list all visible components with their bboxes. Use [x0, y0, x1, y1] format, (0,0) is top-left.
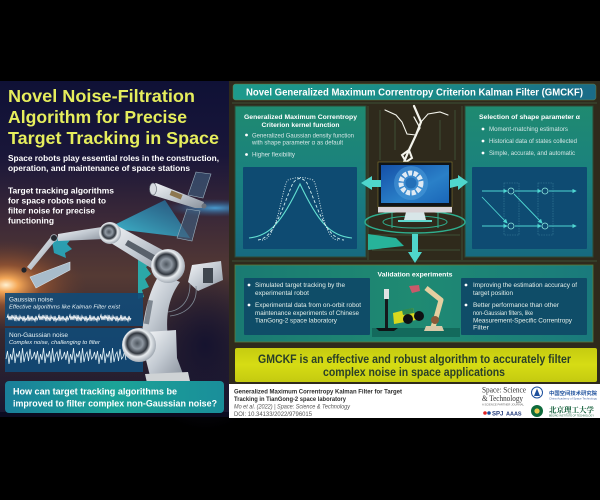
text block: left findings: TianGong-2 space laboratory	[255, 318, 338, 324]
panel: selection of shape parameter: Historical data of states collected	[489, 138, 578, 145]
panel: Gaussian noise: Effective algorithms like Kalman Filter exist	[9, 304, 120, 310]
arrow: down to validation	[408, 234, 422, 263]
panel: selection of shape parameter	[465, 106, 593, 257]
text block: target tracking: for space robots need to	[8, 196, 106, 206]
heading bar: Novel Generalized Maximum Correntropy Criterion Kalman Filter (GMCKF)	[246, 88, 583, 98]
panel: left space background	[0, 81, 275, 430]
wave: Gaussian	[7, 315, 131, 321]
upper arm	[106, 225, 170, 276]
logo: journal: Space: Science	[482, 386, 526, 394]
text block: right findings: Filter	[473, 324, 489, 332]
logo: Beijing Institute of Technology: BEIJING INSTITUTE OF TECHNOLOGY	[549, 414, 594, 418]
callout: conclusion: GMCKF is an effective and robust algorithm to accurately filter	[258, 353, 571, 366]
text block: citation: Generalized Maximum Correntropy Kalman Filter for Target	[234, 388, 402, 396]
panel: Gaussian noise: Gaussian noise	[9, 296, 53, 304]
text block: target tracking: functioning	[8, 216, 54, 226]
wrist joint	[99, 222, 121, 244]
text block: right findings: Measurement-Specific Correntropy	[473, 318, 573, 324]
logo: journal: & Technology	[482, 394, 523, 403]
text block: left findings: maintenance experiments of Chinese	[255, 310, 360, 317]
title: Novel Noise-Filtration	[8, 86, 195, 106]
callout: question: improved to filter complex non-Gaussian noise?	[13, 398, 217, 408]
text block: left findings	[244, 278, 370, 335]
logo: journal	[482, 386, 526, 418]
panel: selection of shape parameter: Selection of shape parameter α	[479, 114, 581, 121]
text block: citation: Tracking in TianGong-2 space laboratory	[234, 396, 347, 403]
icon: lightning	[385, 106, 448, 162]
panel: selection of shape parameter: Simple, accurate, and automatic	[489, 150, 575, 157]
lower arm	[142, 274, 180, 338]
text block: right findings: target position	[473, 290, 514, 297]
text block: right findings: Better performance than other	[473, 302, 559, 309]
icon: computer	[365, 162, 465, 233]
panel: validation experiments: Validation experiments	[378, 272, 453, 278]
arrow: to right panel	[450, 175, 468, 190]
logo: journal: SPJ	[492, 412, 503, 418]
forearm	[58, 227, 104, 241]
wave: non-Gaussian	[6, 348, 126, 364]
text block: target tracking	[8, 186, 114, 226]
panel: Gaussian noise	[5, 293, 143, 326]
text block: right findings: non-Gaussian filters, like	[473, 310, 533, 317]
title: Target Tracking in Space	[8, 128, 219, 148]
logo: journal: A SCIENCE PARTNER JOURNAL	[482, 402, 525, 406]
icon: experiment equipment	[372, 285, 460, 337]
panel: Non-Gaussian noise: Complex noise, challenging to filter	[9, 340, 101, 346]
logo: Beijing Institute of Technology: 北京理工大学	[549, 404, 594, 414]
logo: China Academy of Space Technology: China Academy of Space Technology	[549, 396, 598, 400]
text block: left findings: Simulated target tracking by the	[255, 282, 346, 289]
text block: left findings: experimental robot	[255, 290, 309, 297]
panel: selection of shape parameter: Moment-matching estimators	[489, 126, 568, 133]
text block: right findings: Improving the estimation accuracy of	[473, 282, 577, 289]
back box	[188, 261, 223, 291]
text block: citation	[234, 388, 402, 418]
panel: kernel function: with shape parameter α as default	[251, 140, 343, 146]
text block: citation: Mo et al. (2022) | Space: Science & Technology	[234, 404, 351, 410]
text block: target tracking: Target tracking algorithms	[8, 186, 114, 196]
logo: China Academy of Space Technology	[532, 387, 598, 400]
panel: citation footer	[229, 384, 600, 418]
chart: kernel curves	[243, 167, 357, 249]
logo: China Academy of Space Technology: 中国空间技术研究院	[549, 389, 598, 397]
text block: citation: DOI: 10.34133/2022/9796015	[234, 412, 313, 418]
panel: right background	[229, 81, 600, 385]
logo: journal: AAAS	[506, 412, 522, 418]
text block: intro	[8, 153, 219, 173]
text block: right findings	[461, 278, 587, 335]
logo: Beijing Institute of Technology	[531, 404, 594, 418]
panel: kernel function: Criterion kernel function	[262, 122, 340, 129]
text block: target tracking: filter noise for precise	[8, 206, 95, 216]
title: Algorithm for Precise	[8, 107, 187, 127]
title	[8, 86, 219, 148]
panel: kernel function: Higher flexibility	[252, 152, 296, 158]
arrow: to left panel	[361, 176, 381, 190]
icon: robot base joint	[122, 328, 156, 362]
gripper	[30, 262, 70, 288]
panel: Non-Gaussian noise: Non-Gaussian noise	[9, 332, 68, 339]
icon: robot arm	[21, 222, 223, 383]
chart: state diagram	[472, 167, 587, 249]
elbow joint	[151, 249, 185, 283]
panel: Non-Gaussian noise	[5, 328, 143, 372]
callout: conclusion: complex noise in space applications	[323, 366, 505, 379]
panel: kernel function: Generalized Gaussian density function	[252, 132, 355, 140]
panel: kernel function	[235, 106, 366, 257]
text block: intro: Space robots play essential roles in the construction,	[8, 153, 219, 163]
icon: space station	[150, 172, 211, 241]
text block: intro: operation, and maintenance of space stations	[8, 163, 190, 173]
callout: conclusion	[235, 348, 597, 382]
teal fins	[138, 255, 152, 299]
heading bar	[233, 84, 596, 100]
panel: validation experiments	[235, 265, 593, 342]
base	[146, 330, 183, 376]
callout: question	[5, 381, 224, 413]
text block: left findings: Experimental data from on-orbit robot	[255, 302, 361, 309]
callout: question: How can target tracking algorithms be	[13, 386, 177, 396]
icon: blue tracking beam	[108, 200, 190, 238]
panel: kernel function: Generalized Maximum Correntropy	[244, 114, 357, 121]
icon: teal bar	[368, 234, 404, 250]
